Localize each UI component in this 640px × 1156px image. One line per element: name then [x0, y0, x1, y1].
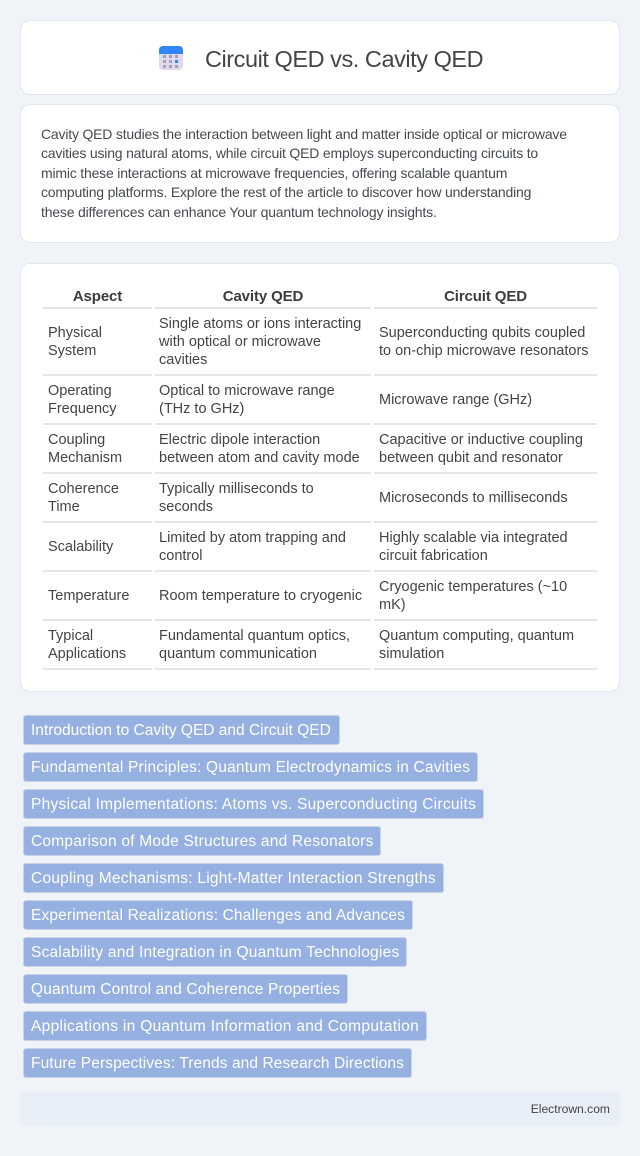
row: typical applications: simulation: [379, 646, 444, 662]
row: coupling mechanism: [43, 423, 597, 466]
row: typical applications: Typical: [48, 628, 93, 644]
topic: coupling mechanisms: [23, 863, 444, 893]
intro paragraph: mimic these interactions at microwave frequencies, offering scalable quantum: [41, 165, 507, 181]
row: scalability: [43, 521, 597, 564]
row: physical system: Physical: [48, 325, 102, 341]
topic: introduction: Introduction to Cavity QED and Circuit QED: [31, 722, 331, 739]
topic: physical implementations: [23, 789, 484, 819]
row: coherence time: Typically milliseconds to: [159, 481, 314, 497]
row: coupling mechanism: Mechanism: [48, 450, 122, 466]
footer: [20, 1092, 620, 1126]
table header: Aspect: [73, 288, 122, 305]
row: coupling mechanism: Capacitive or inductive coupling: [379, 432, 583, 448]
topic: scalability: [23, 937, 407, 967]
topic: coupling mechanisms: Coupling Mechanisms: Light-Matter Interaction Strengths: [31, 870, 436, 887]
topic: experimental realizations: [23, 900, 413, 930]
row: operating frequency: Optical to microwave range: [159, 383, 335, 399]
icon: calendar: [159, 46, 183, 70]
row: coupling mechanism: between atom and cavity mode: [159, 450, 360, 466]
row: coupling mechanism: between qubit and resonator: [379, 450, 563, 466]
topic: experimental realizations: Experimental Realizations: Challenges and Advances: [31, 907, 405, 924]
row: physical system: System: [48, 343, 96, 359]
row: scalability: Highly scalable via integrated: [379, 530, 568, 546]
intro paragraph: computing platforms. Explore the rest of the article to discover how understanding: [41, 184, 531, 200]
row: temperature: Room temperature to cryogenic: [159, 588, 362, 604]
row: operating frequency: Operating: [48, 383, 112, 399]
topic: physical implementations: Physical Implementations: Atoms vs. Superconducting Circuits: [31, 796, 476, 813]
row: coupling mechanism: Electric dipole interaction: [159, 432, 320, 448]
panel: comparison table: [20, 263, 620, 692]
row: operating frequency: Frequency: [48, 401, 117, 417]
topic: mode structures: Comparison of Mode Structures and Resonators: [31, 833, 374, 850]
row: scalability: Limited by atom trapping and: [159, 530, 346, 546]
intro paragraph: these differences can enhance Your quantum technology insights.: [41, 204, 437, 220]
row: temperature: Temperature: [48, 588, 129, 604]
row: typical applications: Fundamental quantum optics,: [159, 628, 350, 644]
row: physical system: to on-chip microwave resonators: [379, 343, 589, 359]
row: physical system: with optical or microwave: [159, 334, 321, 350]
row: typical applications: Applications: [48, 646, 126, 662]
row: temperature: mK): [379, 597, 406, 613]
row: scalability: Scalability: [48, 539, 113, 555]
intro paragraph: Cavity QED studies the interaction between light and matter inside optical or microwave: [41, 126, 567, 142]
row: coherence time: seconds: [159, 499, 213, 515]
row: temperature: Cryogenic temperatures (~10: [379, 579, 567, 595]
topic: introduction: [23, 715, 340, 745]
intro text card: [20, 104, 620, 243]
table header: [73, 288, 527, 305]
topic: fundamental principles: Fundamental Principles: Quantum Electrodynamics in Cavities: [31, 759, 470, 776]
topic: scalability: Scalability and Integration in Quantum Technologies: [31, 944, 399, 961]
row: coherence time: Microseconds to milliseconds: [379, 490, 568, 506]
row: physical system: [43, 307, 597, 368]
row: operating frequency: Microwave range (GHz): [379, 392, 532, 408]
row: physical system: cavities: [159, 352, 207, 368]
row: coherence time: [43, 472, 597, 515]
intro paragraph: [41, 126, 567, 220]
row: coherence time: Coherence: [48, 481, 119, 497]
topic: quantum control: Quantum Control and Coherence Properties: [31, 981, 340, 998]
title: Circuit QED vs. Cavity QED: [205, 46, 483, 72]
intro paragraph: cavities using natural atoms, while circuit QED employs superconducting circuits to: [41, 145, 538, 161]
topic: quantum control: [23, 974, 348, 1004]
row: scalability: control: [159, 548, 203, 564]
row: typical applications: Quantum computing, quantum: [379, 628, 574, 644]
title card: [20, 20, 620, 95]
row: physical system: Superconducting qubits coupled: [379, 325, 585, 341]
row: physical system: Single atoms or ions interacting: [159, 316, 361, 332]
topic: future perspectives: [23, 1048, 412, 1078]
row: scalability: circuit fabrication: [379, 548, 488, 564]
table header: Circuit QED: [444, 288, 527, 305]
row: operating frequency: (THz to GHz): [159, 401, 244, 417]
topic: mode structures: [23, 826, 381, 856]
footer credit: Electrown.com: [531, 1102, 610, 1116]
topic: future perspectives: Future Perspectives: Trends and Research Directions: [31, 1055, 404, 1072]
row: coupling mechanism: Coupling: [48, 432, 105, 448]
row: temperature: [43, 570, 597, 613]
row: coherence time: Time: [48, 499, 80, 515]
topic: applications: [23, 1011, 427, 1041]
topic links list: [23, 715, 484, 1078]
table header: Cavity QED: [223, 288, 303, 305]
row: typical applications: [43, 619, 597, 670]
topic: applications: Applications in Quantum Information and Computation: [31, 1018, 419, 1035]
row: operating frequency: [43, 374, 597, 417]
row: typical applications: quantum communication: [159, 646, 317, 662]
topic: fundamental principles: [23, 752, 478, 782]
